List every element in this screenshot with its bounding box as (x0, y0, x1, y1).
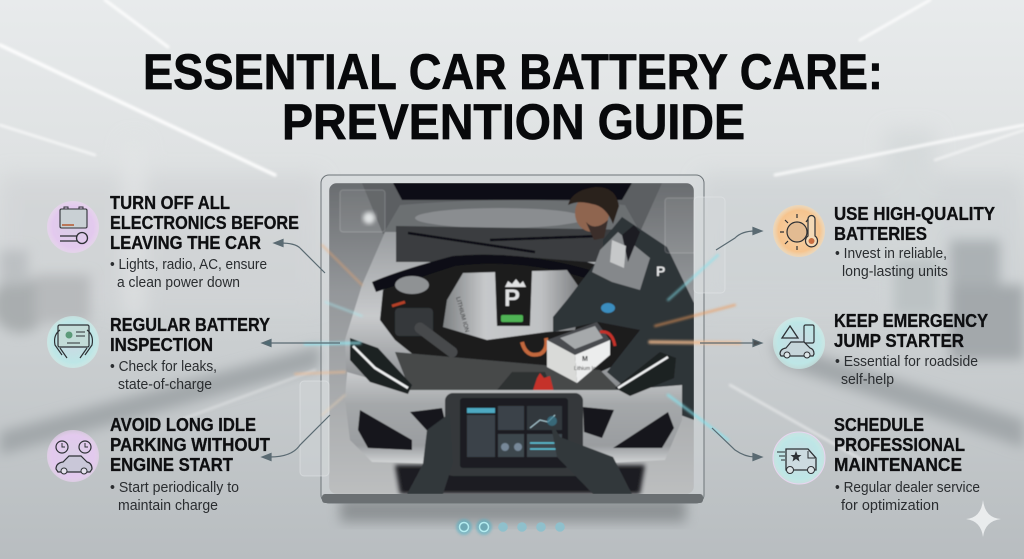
tip: avoid long idle parking: maintain charge (118, 497, 218, 514)
arrow: to turn off electronics (274, 240, 325, 273)
tip: avoid long idle parking: • Start periodically to (110, 479, 239, 496)
tip: turn off electronics: • Lights, radio, AC, ensure (110, 256, 267, 273)
tip: avoid long idle parking: AVOID LONG IDLE (110, 415, 256, 435)
tip: turn off electronics: a clean power down (117, 274, 240, 291)
engine components (392, 276, 546, 355)
tip: emergency jump starter: KEEP EMERGENCY (834, 311, 988, 331)
tip: professional maintenance (834, 415, 980, 514)
tip: regular battery inspection: REGULAR BATTERY (110, 315, 270, 335)
tip: high-quality batteries: • Invest in reliable, (835, 245, 947, 262)
icon: tablet in hands (47, 316, 99, 368)
icon: clocks and car (47, 430, 99, 482)
connector arrows (262, 228, 762, 460)
tip: high-quality batteries: long-lasting units (842, 263, 948, 280)
engine cover: LITHIUM ION (454, 296, 469, 333)
sparkle watermark (966, 500, 1001, 537)
car body fender (345, 232, 621, 387)
tip: emergency jump starter (834, 311, 988, 388)
tip: avoid long idle parking (110, 415, 270, 514)
tip: professional maintenance: • Regular dealer service (835, 479, 980, 496)
arrow: to idle parking (262, 415, 330, 460)
mechanic (553, 187, 694, 420)
engine cover: P (504, 285, 520, 312)
cowl and wipers (396, 226, 640, 262)
headlight left (350, 338, 412, 394)
front bumper (345, 372, 682, 464)
front grilles (358, 407, 674, 450)
tip: turn off electronics: TURN OFF ALL (110, 193, 230, 213)
translucent hud cards (340, 190, 705, 253)
scanner tablet (445, 393, 583, 476)
tip: professional maintenance: SCHEDULE (834, 415, 924, 435)
icon: sun and thermometer (773, 205, 825, 257)
side hud panel right (694, 197, 725, 293)
central panel: mechanic servicing car battery (300, 175, 725, 503)
arrow: to battery inspection (262, 340, 340, 346)
red jump clamp (533, 373, 554, 392)
icon: warning, phone and car (773, 317, 825, 369)
arrow: to professional maintenance (712, 428, 762, 460)
shadow below central panel (340, 498, 686, 522)
title: ESSENTIAL CAR BATTERY CARE: (143, 44, 883, 100)
side hud panel left (300, 381, 329, 476)
tip: high-quality batteries: USE HIGH-QUALITY (834, 204, 995, 224)
tip: regular battery inspection (110, 315, 270, 393)
icon: service van (773, 432, 825, 484)
icon: battery and key (47, 201, 99, 253)
tip: emergency jump starter: • Essential for roadside (835, 353, 978, 370)
arrow: to jump starter (700, 340, 762, 346)
battery (547, 303, 615, 383)
battery: Lithium Ion (574, 366, 599, 372)
tip: emergency jump starter: JUMP STARTER (834, 331, 964, 351)
tip: emergency jump starter: self-help (841, 371, 894, 388)
tip: professional maintenance: MAINTENANCE (834, 455, 962, 475)
gloved hands (407, 413, 632, 494)
tip: regular battery inspection: state-of-charge (118, 376, 212, 393)
tip: avoid long idle parking: PARKING WITHOUT (110, 435, 270, 455)
tip: professional maintenance: PROFESSIONAL (834, 435, 965, 455)
tip: turn off electronics (110, 193, 299, 291)
bottom shadow under car (395, 465, 645, 494)
tip: professional maintenance: for optimization (841, 497, 939, 514)
tip: regular battery inspection: • Check for leaks, (110, 358, 217, 375)
battery: M (582, 356, 588, 363)
title: PREVENTION GUIDE (282, 94, 745, 150)
mechanic: P (656, 263, 665, 279)
title (143, 44, 883, 150)
tip: high-quality batteries: BATTERIES (834, 224, 927, 244)
front panel below bay (395, 352, 620, 390)
arrow: to high-quality batteries (716, 228, 762, 250)
tip: turn off electronics: LEAVING THE CAR (110, 233, 261, 253)
headlight right (615, 352, 676, 396)
open hood (362, 183, 662, 234)
engine cover (443, 270, 583, 340)
energy light streaks (295, 245, 740, 440)
tip: avoid long idle parking: ENGINE START (110, 455, 233, 475)
pagination dots (456, 519, 565, 535)
tip: high-quality batteries (834, 204, 995, 280)
engine bay (380, 255, 650, 372)
tip: turn off electronics: ELECTRONICS BEFORE (110, 213, 299, 233)
tip: regular battery inspection: INSPECTION (110, 335, 213, 355)
